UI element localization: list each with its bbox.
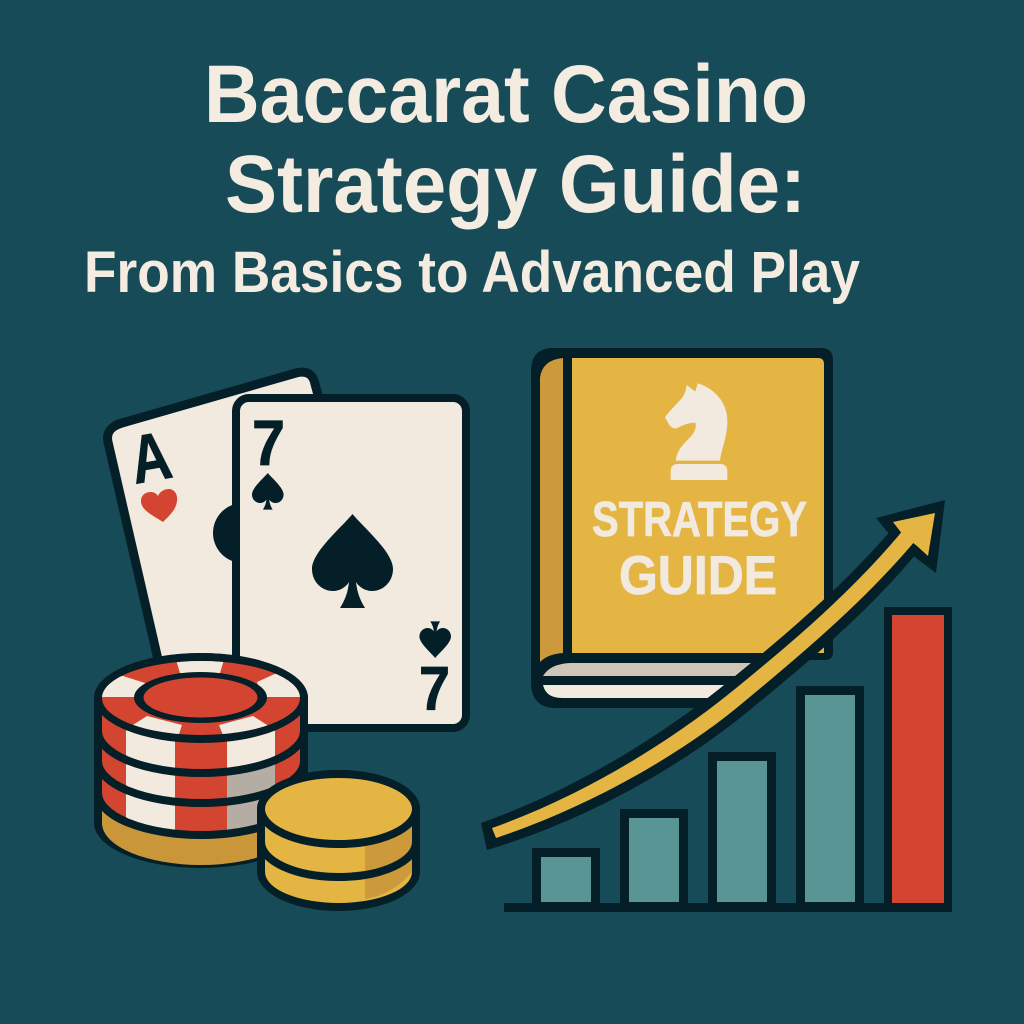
title: Strategy Guide: [225, 139, 806, 230]
front card: seven of spades: 7 [252, 407, 285, 479]
title: Baccarat Casino [204, 49, 808, 140]
icon: large spade [312, 514, 393, 608]
front card: seven of spades [236, 398, 466, 728]
bar chart [504, 611, 952, 912]
bar 1 [536, 852, 596, 906]
bar 2 [624, 814, 684, 906]
infographic canvas [88, 62, 952, 912]
red chip stack [90, 650, 310, 868]
book cover [572, 358, 824, 653]
growth arrow [481, 500, 945, 850]
gold chip stack [257, 770, 420, 911]
book title [592, 493, 807, 606]
icon: small spade [252, 473, 284, 510]
strategy guide book [531, 348, 833, 708]
icon: chess knight [665, 383, 727, 480]
bar 5 [888, 611, 948, 907]
front card: seven of spades: 7 [419, 655, 450, 724]
book title: GUIDE [619, 544, 777, 606]
title: From Basics to Advanced Play [84, 240, 860, 305]
icon: heart [141, 489, 177, 522]
bar 4 [800, 690, 860, 906]
book spine [540, 358, 563, 662]
book title: STRATEGY [592, 493, 807, 547]
chip top face [90, 650, 310, 743]
back card: ace of hearts [108, 372, 330, 690]
bar 3 [712, 756, 772, 906]
back card: ace of hearts: A [124, 417, 177, 499]
title [84, 49, 860, 305]
book pages [543, 663, 775, 698]
playing cards [108, 372, 466, 728]
icon: inverted small spade [419, 621, 451, 658]
